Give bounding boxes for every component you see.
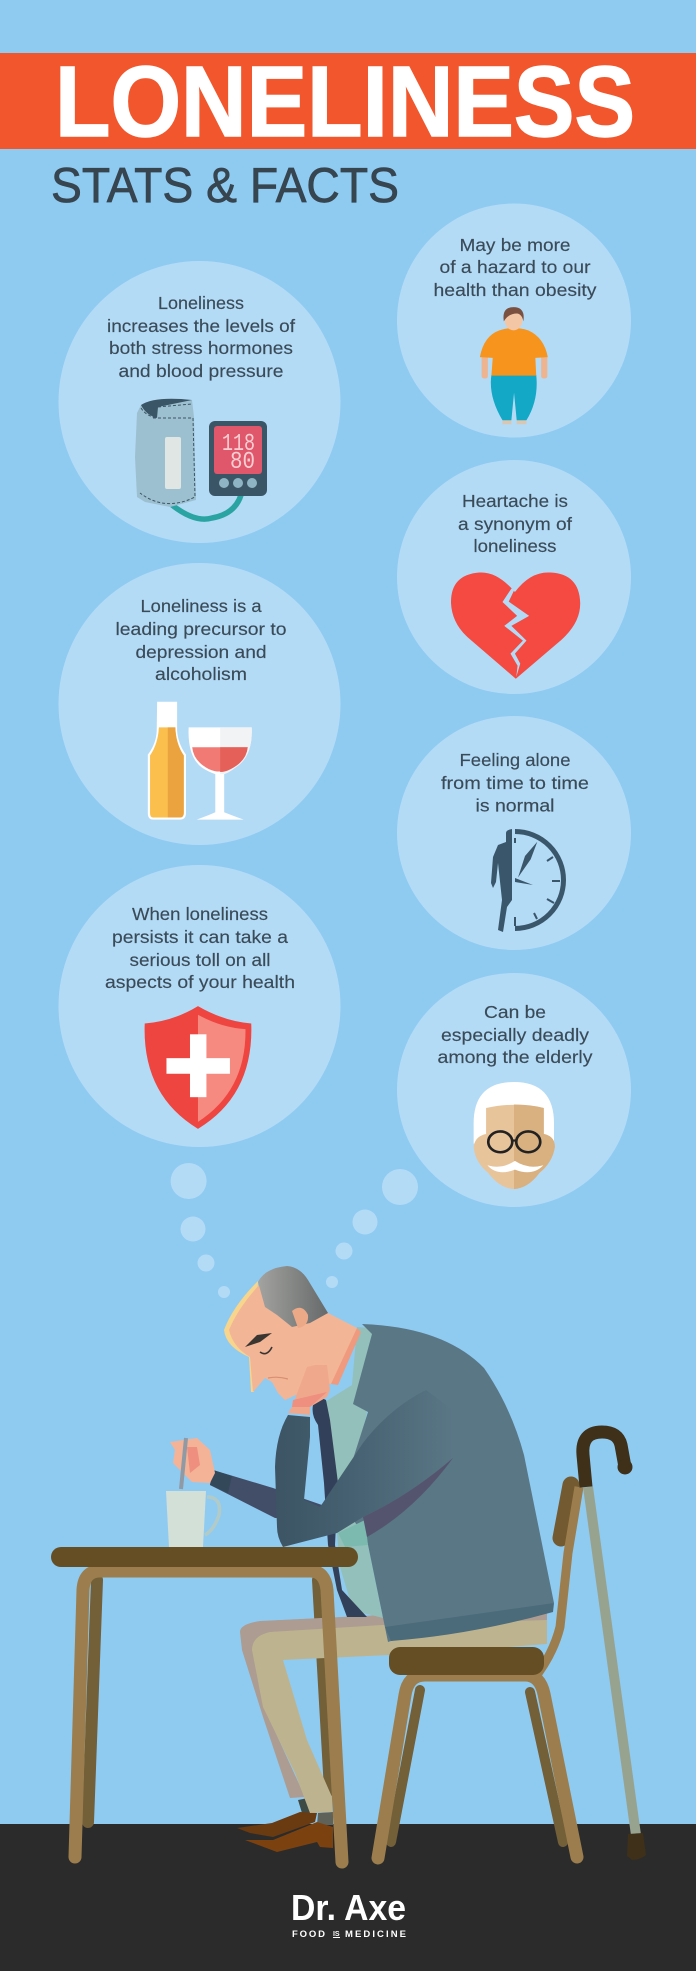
shadow under arm [363, 1458, 453, 1537]
table rear legs [88, 1580, 330, 1822]
table [51, 1547, 358, 1862]
text: feeling alone fact: Feeling alone [460, 750, 570, 770]
shoes [237, 1798, 333, 1852]
illustration: elderly man seated at table [51, 1266, 646, 1862]
far arm and hand [170, 1438, 322, 1520]
thought bubbles: right trail [326, 1169, 418, 1288]
text: heartache fact: loneliness [474, 536, 557, 556]
title banner: LONELINESS [55, 46, 635, 158]
text: blood pressure fact: Loneliness [158, 293, 244, 313]
icon: broken heart [451, 572, 580, 679]
near arm [275, 1390, 453, 1547]
text: obesity fact: health than obesity [434, 280, 597, 300]
text: feeling alone fact: from time to time [441, 773, 589, 793]
panel: hazard vs obesity [397, 204, 631, 438]
icon: bottle and wine glass [148, 702, 252, 820]
text: health toll fact [105, 904, 295, 992]
ear [292, 1308, 308, 1328]
text: heartache fact: Heartache is [462, 491, 568, 511]
floor [0, 1824, 696, 1971]
text: feeling alone fact [441, 750, 589, 816]
logo: Dr. Axe: MEDICINE [345, 1929, 406, 1940]
chair seat [389, 1647, 544, 1675]
neck shadow [331, 1328, 361, 1385]
text: alcoholism fact: alcoholism [155, 664, 247, 684]
text: health toll fact: persists it can take a [112, 927, 288, 947]
icon: blood pressure monitor [135, 399, 267, 519]
text: obesity fact: May be more [460, 235, 570, 255]
text: alcoholism fact: depression and [136, 642, 266, 662]
text: obesity fact [434, 235, 597, 300]
icon: blood pressure monitor: 80 [230, 449, 255, 476]
text: health toll fact: aspects of your health [105, 972, 295, 992]
icon: elderly man face [474, 1082, 555, 1189]
panel: feeling alone [397, 716, 631, 950]
text: elderly fact: especially deadly [441, 1025, 589, 1045]
face details [245, 1333, 272, 1347]
logo: Dr. Axe: Dr. Axe [291, 1887, 406, 1928]
trousers [240, 1608, 547, 1813]
head [224, 1266, 361, 1415]
text: health toll fact: When loneliness [132, 904, 268, 924]
jacket [340, 1324, 554, 1642]
text: elderly fact: among the elderly [438, 1047, 593, 1067]
icon: medical shield [145, 1006, 251, 1129]
logo: Dr. Axe: IS [333, 1931, 340, 1938]
panel: depression and alcoholism [58, 563, 340, 845]
icon: obese person [480, 307, 548, 424]
text: health toll fact: serious toll on all [130, 950, 270, 970]
text: heartache fact [458, 491, 572, 556]
logo: Dr. Axe: FOOD [292, 1929, 325, 1940]
cup [166, 1491, 220, 1547]
text: blood pressure fact: increases the levels of [107, 316, 295, 336]
hair [258, 1266, 328, 1327]
text: alcoholism fact: leading precursor to [116, 619, 286, 639]
tie [313, 1398, 367, 1617]
text: heartache fact: a synonym of [458, 514, 572, 534]
chair [378, 1485, 579, 1858]
text: elderly fact: Can be [484, 1002, 546, 1022]
panel: toll on health [58, 865, 340, 1147]
text: blood pressure fact [107, 293, 295, 381]
subtitle: STATS & FACTS [51, 159, 399, 213]
text: blood pressure fact: and blood pressure [118, 361, 284, 381]
panel: deadly among elderly [397, 973, 631, 1207]
panel: stress hormones and blood pressure [58, 261, 340, 543]
text: blood pressure fact: both stress hormones [109, 338, 293, 358]
icon: blood pressure monitor: 118 [222, 431, 255, 458]
text: feeling alone fact: is normal [476, 796, 554, 816]
teal shadow on shirt [338, 1520, 368, 1547]
supporting hand [288, 1365, 330, 1415]
cane [583, 1432, 646, 1860]
text: elderly fact [438, 1002, 593, 1067]
shirt [320, 1327, 383, 1618]
text: alcoholism fact [116, 596, 286, 684]
panel: heartache synonym [397, 460, 631, 694]
text: obesity fact: of a hazard to our [440, 257, 591, 277]
text: alcoholism fact: Loneliness is a [140, 596, 262, 616]
thought bubbles: left trail [171, 1163, 230, 1298]
icon: half clock half person [491, 829, 563, 932]
